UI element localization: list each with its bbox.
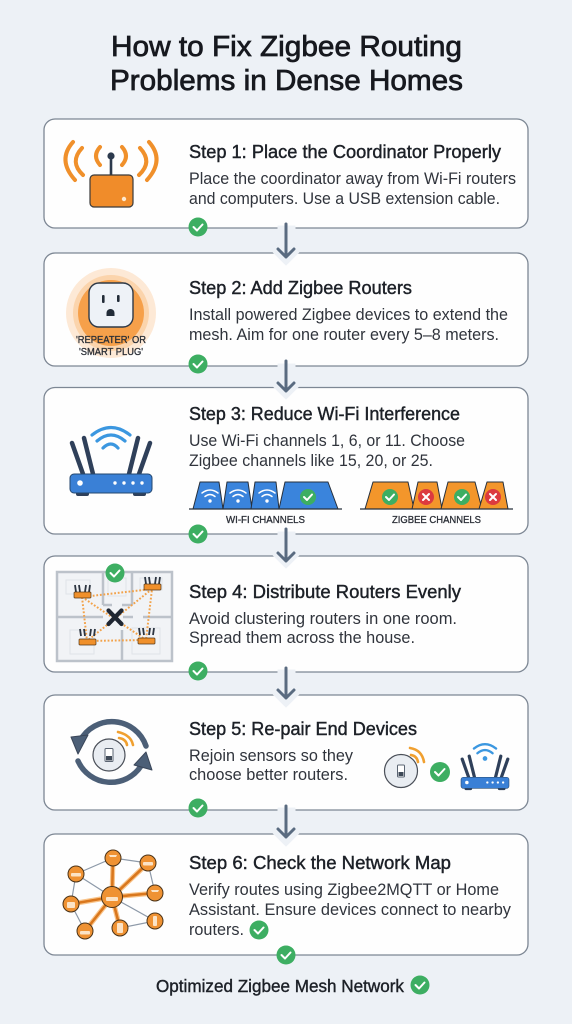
check badge 2 [188,354,208,374]
step 1 heading: Step 1: Place the Coordinator Properly [189,142,501,162]
step 6 heading: Step 6: Check the Network Map [189,853,451,873]
arrow 3 [272,529,300,568]
step 5 heading: Step 5: Re-pair End Devices [189,719,417,739]
check badge 6 [276,946,296,964]
step 4 text: Avoid clustering routers in one room. [189,610,457,628]
step 2 text [189,306,508,344]
arrow 4 [272,668,300,707]
panel: step 1 [44,119,528,228]
step 1 text [189,170,516,208]
step 4 text [189,610,457,647]
step 3 heading: Step 3: Reduce Wi-Fi Interference [189,404,460,424]
icon: sensor connected to router [384,744,509,790]
icon: network map [63,850,163,939]
x mark [108,610,122,624]
step 3 text: Zigbee channels like 15, 20, or 25. [189,452,433,470]
title [110,31,463,97]
check [106,564,124,582]
panel: step 3 [44,388,528,534]
arrow 1 [272,224,300,265]
label: zigbee channels: ZIGBEE CHANNELS [392,515,481,526]
footer: Optimized Zigbee Mesh Network [156,976,404,996]
step 4 heading: Step 4: Distribute Routers Evenly [189,582,461,602]
check badge 3 [188,524,208,544]
check badge 4 [188,662,208,680]
step 3 text: Use Wi-Fi channels 1, 6, or 11. Choose [189,432,465,450]
label: wi-fi channels: WI-FI CHANNELS [226,515,305,526]
step 6 text: routers. [189,921,244,939]
title: How to Fix Zigbee Routing [111,31,462,63]
icon: smart plug [66,268,156,358]
plug caption: 'REPEATER' OR [76,335,146,346]
icon: wi-fi router [70,428,152,496]
title: Problems in Dense Homes [110,65,463,97]
icon: re-pair cycle [71,722,152,782]
panel: step 6 [44,834,528,955]
arrow 2 [272,361,300,399]
step 1 text: and computers. Use a USB extension cable. [189,190,500,208]
panel: step 5 [44,695,528,810]
plug caption [76,335,146,358]
routers [74,577,161,645]
wi-fi channels chart [189,482,342,509]
step 3 text [189,432,465,470]
check badge 5 [188,798,208,818]
panel: step 2 [44,253,528,366]
step 5 text: Rejoin sensors so they [189,747,354,765]
step 5 text: choose better routers. [189,766,348,784]
check badge 1 [188,218,208,236]
floor plan with routers [57,564,172,661]
step 4 text: Spread them across the house. [189,629,415,647]
arrow 5 [272,806,300,846]
step 6 text: Assistant. Ensure devices connect to nearby [189,901,512,919]
step 2 heading: Step 2: Add Zigbee Routers [189,278,412,298]
step 1 text: Place the coordinator away from Wi-Fi routers [189,170,516,188]
step 2 text: mesh. Aim for one router every 5–8 meters. [189,326,499,344]
panel: step 4 [44,556,528,672]
step 5 text [189,747,354,784]
step 6 text [189,881,512,939]
plug caption: 'SMART PLUG' [79,347,143,358]
step 6 text: Verify routes using Zigbee2MQTT or Home [189,881,499,899]
icon: coordinator [65,142,157,207]
step 2 text: Install powered Zigbee devices to extend the [189,306,508,324]
inline check [250,920,268,940]
zigbee channels chart [360,482,513,509]
